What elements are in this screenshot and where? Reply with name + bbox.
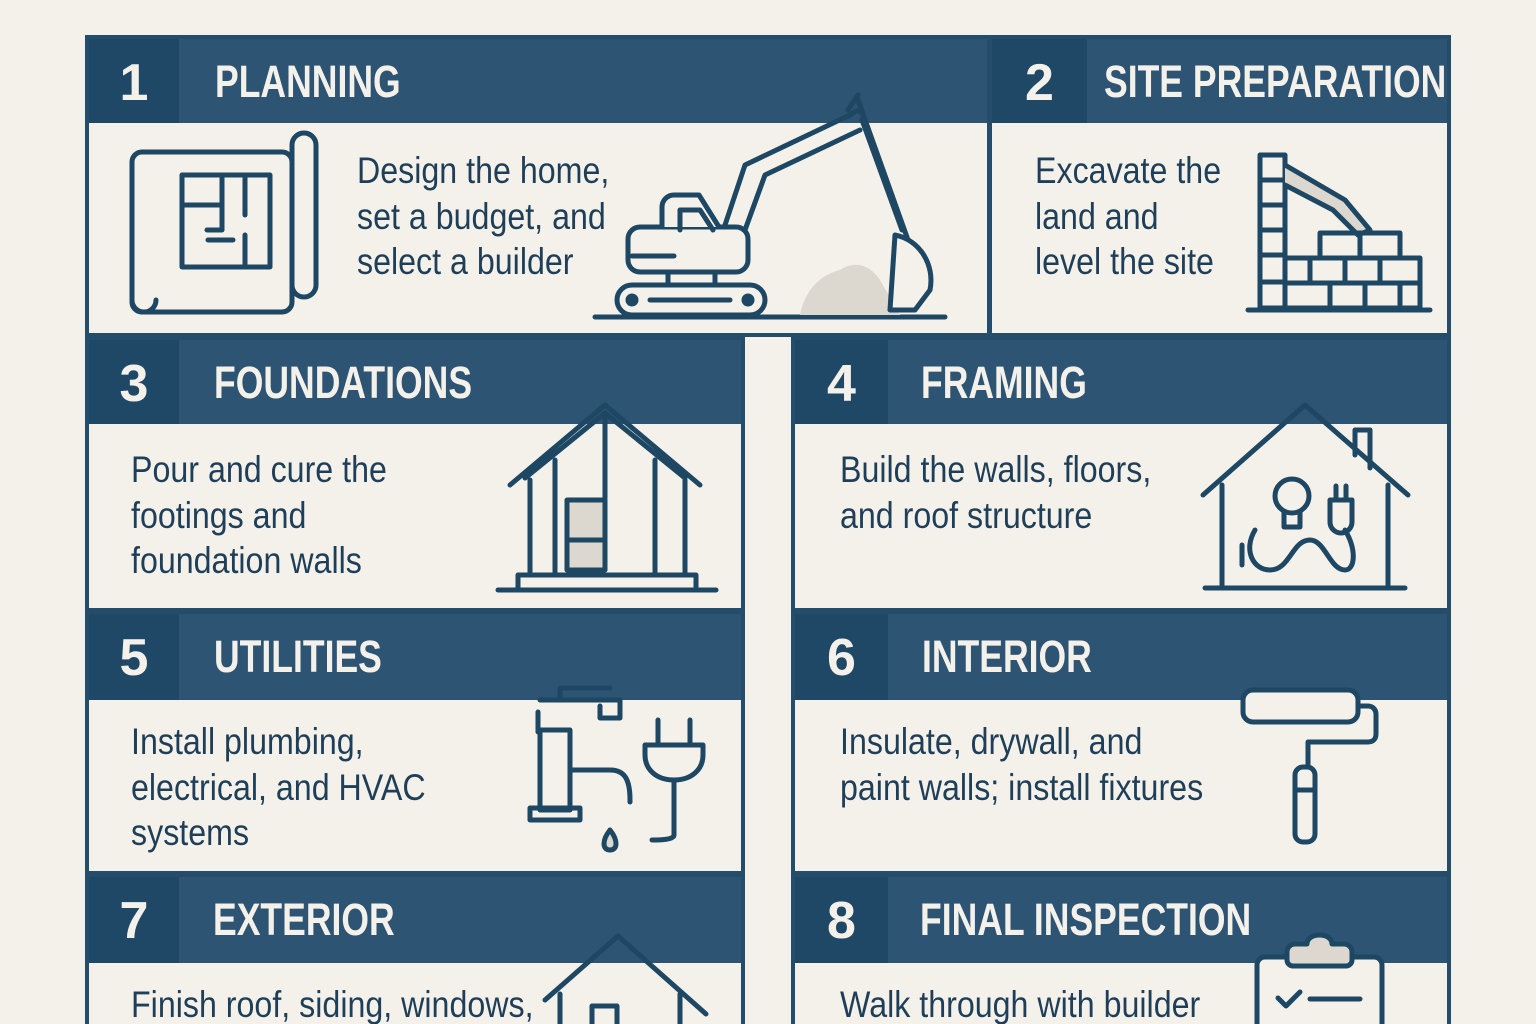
text 4: Build the walls, floors, <box>840 449 1151 490</box>
text 5: electrical, and HVAC <box>131 766 426 808</box>
header 2 <box>992 39 1447 123</box>
text 6: paint walls; install fixtures <box>840 766 1203 808</box>
text 3: footings and <box>131 494 306 536</box>
text 4: and roof structure <box>840 494 1092 536</box>
icon: brick wall <box>1248 155 1430 310</box>
text 1: set a budget, and <box>357 196 606 236</box>
panel 6: interior <box>791 610 1451 875</box>
text 3: Pour and cure the <box>131 449 387 490</box>
header 3: 3 <box>120 355 148 413</box>
text 7: Finish roof, siding, windows, <box>131 984 534 1024</box>
header 5: UTILITIES <box>214 631 382 682</box>
text 1 <box>357 150 609 282</box>
text 1: Design the home, <box>357 150 609 191</box>
panel 3: foundations <box>85 336 745 612</box>
text 5: systems <box>131 812 249 853</box>
panel 7: exterior <box>85 873 745 1024</box>
text 2: Excavate the <box>1035 150 1221 191</box>
text 5 <box>131 721 426 853</box>
header 1: PLANNING <box>215 56 401 107</box>
icon: house exterior <box>545 936 706 1024</box>
header 6 <box>795 614 1447 700</box>
icon: excavator <box>595 95 945 317</box>
header 1: 1 <box>120 54 148 112</box>
icon: blueprint <box>132 133 316 312</box>
text 2: level the site <box>1035 241 1214 282</box>
header 7 <box>89 877 741 963</box>
header 5: 5 <box>120 629 148 687</box>
text 5: Install plumbing, <box>131 721 364 762</box>
text 8: Walk through with builder <box>840 984 1200 1024</box>
header 6: INTERIOR <box>922 631 1092 682</box>
icon: paint roller <box>1243 690 1376 842</box>
header 8: 8 <box>827 892 856 950</box>
panel 5: utilities <box>85 610 745 875</box>
header 5 <box>89 614 741 700</box>
header 8 <box>795 877 1447 963</box>
header 4: FRAMING <box>921 357 1087 408</box>
panel 8: final inspection <box>791 873 1451 1024</box>
panel 4: framing <box>791 336 1451 612</box>
icon: house with electricity <box>1203 405 1408 588</box>
header 6: 6 <box>827 629 856 687</box>
panel 1: planning <box>85 35 991 337</box>
text 2: land and <box>1035 196 1159 236</box>
header 2: SITE PREPARATION <box>1104 56 1446 107</box>
text 4 <box>840 449 1151 536</box>
header 8: FINAL INSPECTION <box>920 894 1251 945</box>
text 2 <box>1035 150 1221 282</box>
text 3 <box>131 449 387 581</box>
header 3: FOUNDATIONS <box>214 357 472 408</box>
icon: faucet and plug <box>530 688 703 850</box>
text 1: select a builder <box>357 241 574 282</box>
header 1 <box>89 39 987 123</box>
header 4 <box>795 340 1447 424</box>
header 4: 4 <box>827 355 856 413</box>
text 3: foundation walls <box>131 540 362 581</box>
header 7: 7 <box>120 892 148 950</box>
header 7: EXTERIOR <box>213 894 395 945</box>
header 3 <box>89 340 741 424</box>
text 6: Insulate, drywall, and <box>840 721 1142 762</box>
header 2: 2 <box>1025 54 1054 112</box>
panel 2: site preparation <box>988 35 1451 337</box>
icon: clipboard <box>1257 935 1382 1024</box>
text 6 <box>840 721 1203 808</box>
icon: framed house <box>498 405 716 590</box>
